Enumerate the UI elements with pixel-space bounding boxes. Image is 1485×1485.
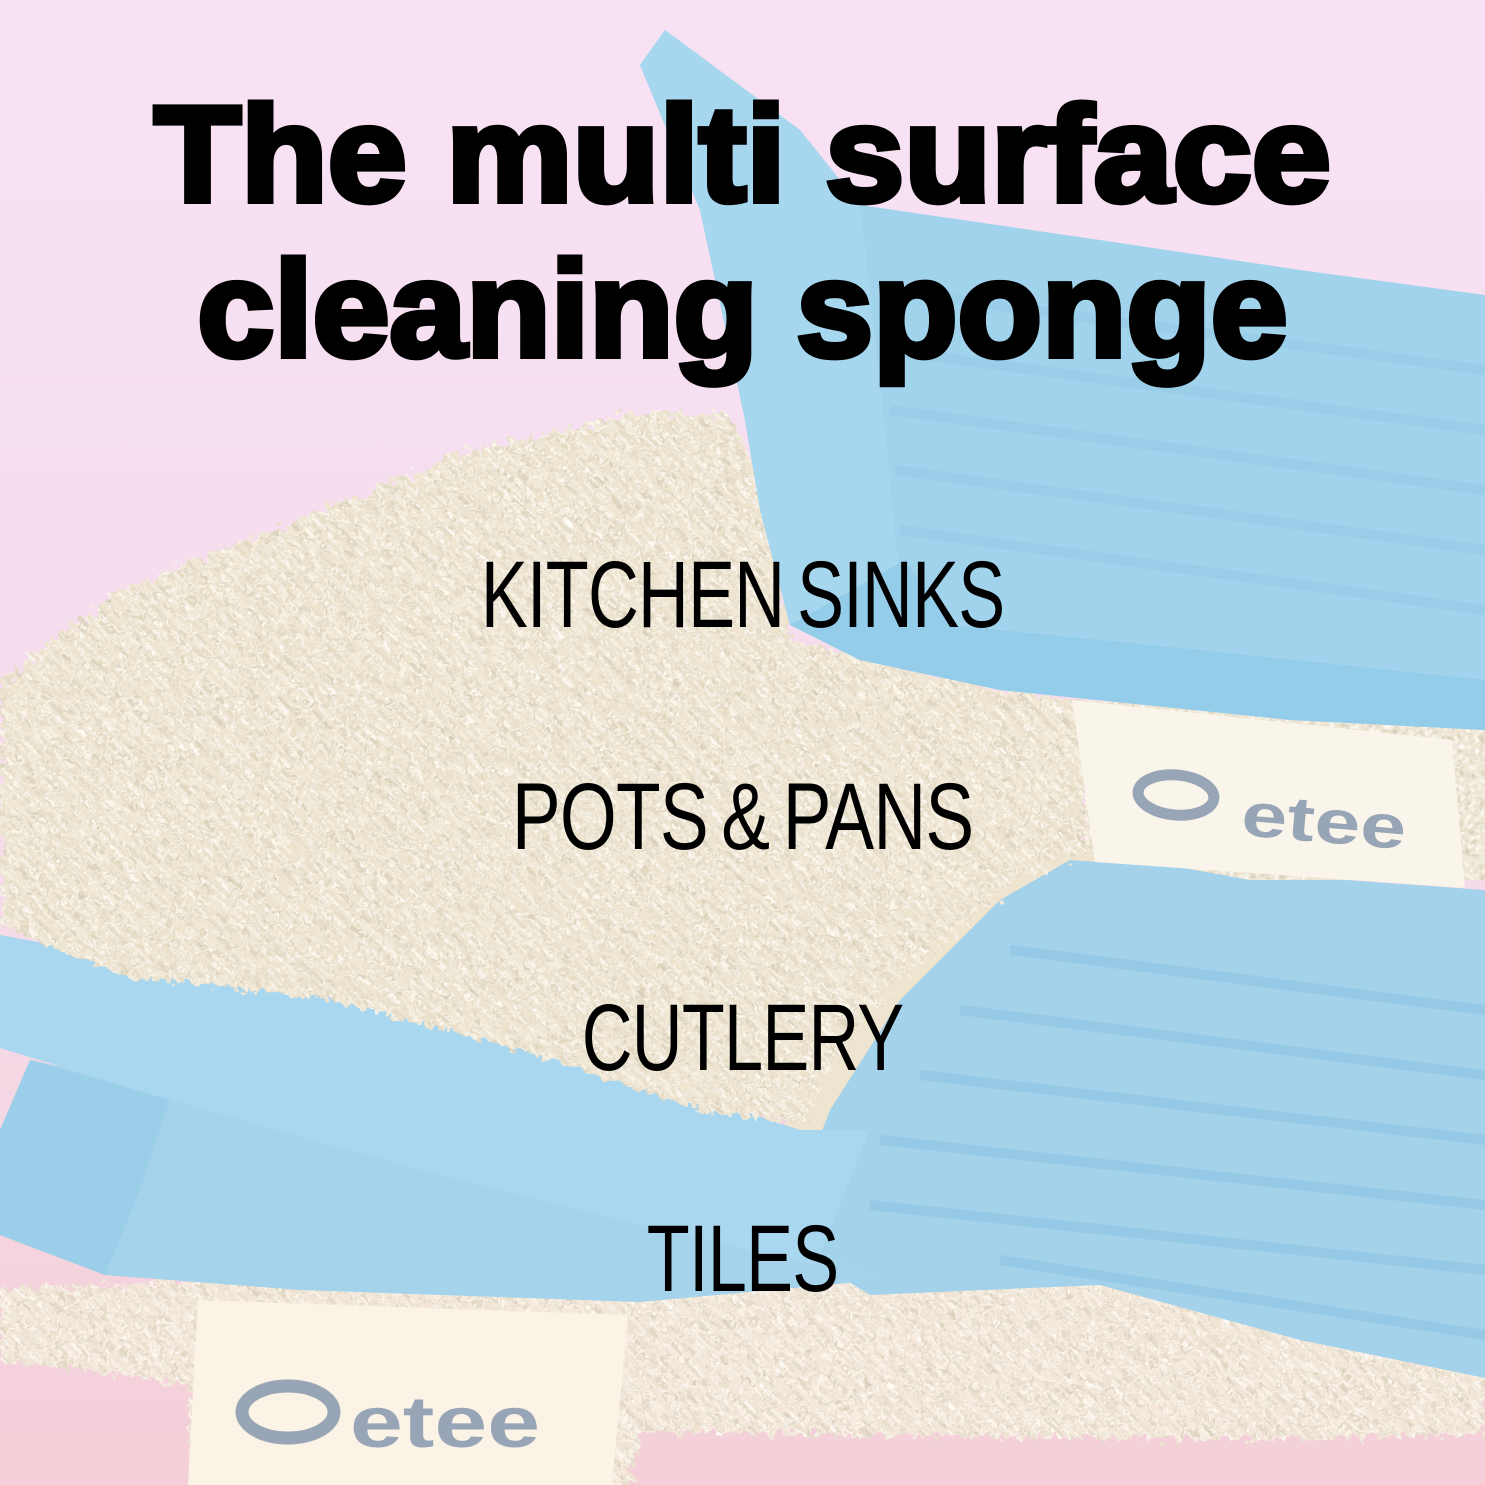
loofah behind tag <box>1085 700 1485 880</box>
item: pots and pans: POTS & PANS <box>512 764 973 870</box>
lower left blue sponge <box>0 1060 880 1302</box>
title <box>152 78 1331 388</box>
title: The multi surface <box>154 78 1331 230</box>
title: cleaning sponge <box>197 233 1288 385</box>
middle blue sponge sheet <box>0 935 870 1265</box>
item: cutlery: CUTLERY <box>582 985 903 1091</box>
upper right blue sponge <box>640 30 1485 730</box>
central loofah <box>0 412 1085 1125</box>
etee tag top <box>1072 700 1465 888</box>
etee tag bottom: etee <box>350 1383 540 1463</box>
lower loofah fringe <box>0 1265 1485 1485</box>
item: tiles: TILES <box>647 1206 838 1312</box>
etee tag top: etee <box>1239 780 1409 863</box>
lower right blue sponge <box>780 860 1485 1378</box>
item: kitchen sinks: KITCHEN SINKS <box>481 542 1004 648</box>
etee tag bottom <box>188 1300 628 1485</box>
loofah underlay behind lower sponge <box>780 840 1120 1135</box>
